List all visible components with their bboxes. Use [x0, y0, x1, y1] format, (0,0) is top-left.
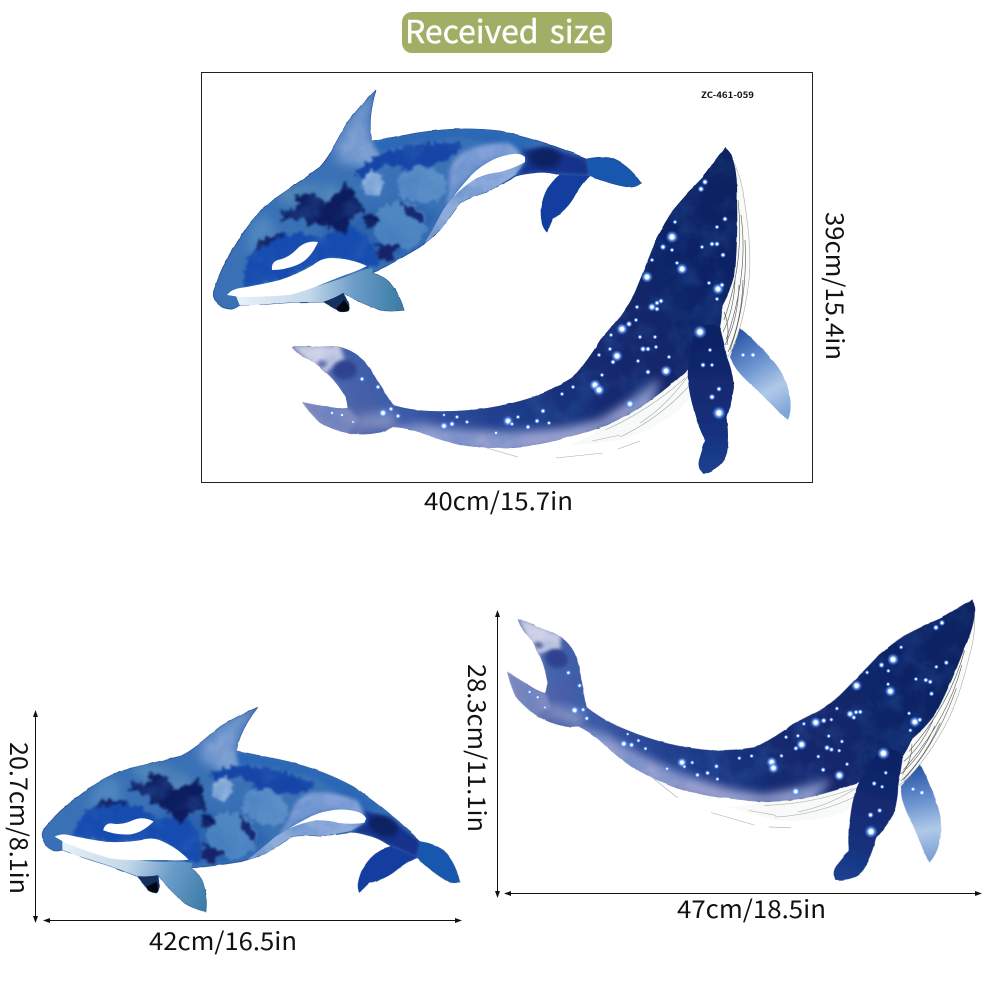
dimension: humpback width: 47cm/18.5in: [677, 891, 826, 926]
pectoral flipper: [688, 324, 734, 474]
panel: received sticker sheet: [202, 72, 812, 482]
illustration: humpback whale on sheet: [290, 145, 791, 474]
belly fin: [236, 268, 404, 311]
illustration: humpback sticker: [471, 440, 1000, 911]
dimension: sheet height: 39cm/15.4in: [818, 212, 853, 360]
arrow: orca height: [33, 710, 38, 923]
white flank gap: [453, 154, 525, 197]
stars: [330, 178, 756, 436]
sheet code label: ZC-461-059: [701, 89, 754, 101]
title: Received size: Received size: [405, 7, 606, 53]
eye patch: [272, 242, 318, 270]
tail fluke lower: [541, 175, 590, 232]
dimension: orca height: 20.7cm/8.1in: [2, 742, 37, 894]
arrow: orca width: [43, 918, 462, 923]
throat belly with grooves: [487, 155, 750, 458]
dimension: sheet width: 40cm/15.7in: [424, 483, 573, 518]
arrow: humpback height: [495, 610, 500, 898]
dimension: orca width: 42cm/16.5in: [149, 923, 297, 958]
dimension: humpback height: 28.3cm/11.1in: [460, 664, 495, 832]
illustration: orca on sheet: [205, 85, 645, 315]
far flipper: [730, 328, 791, 420]
body: [292, 147, 737, 448]
tail tip: [587, 157, 641, 187]
illustration: orca sticker: [28, 643, 497, 1000]
arrow: humpback width: [504, 891, 982, 896]
white belly patch: [227, 258, 367, 297]
tail stock: [517, 147, 590, 176]
